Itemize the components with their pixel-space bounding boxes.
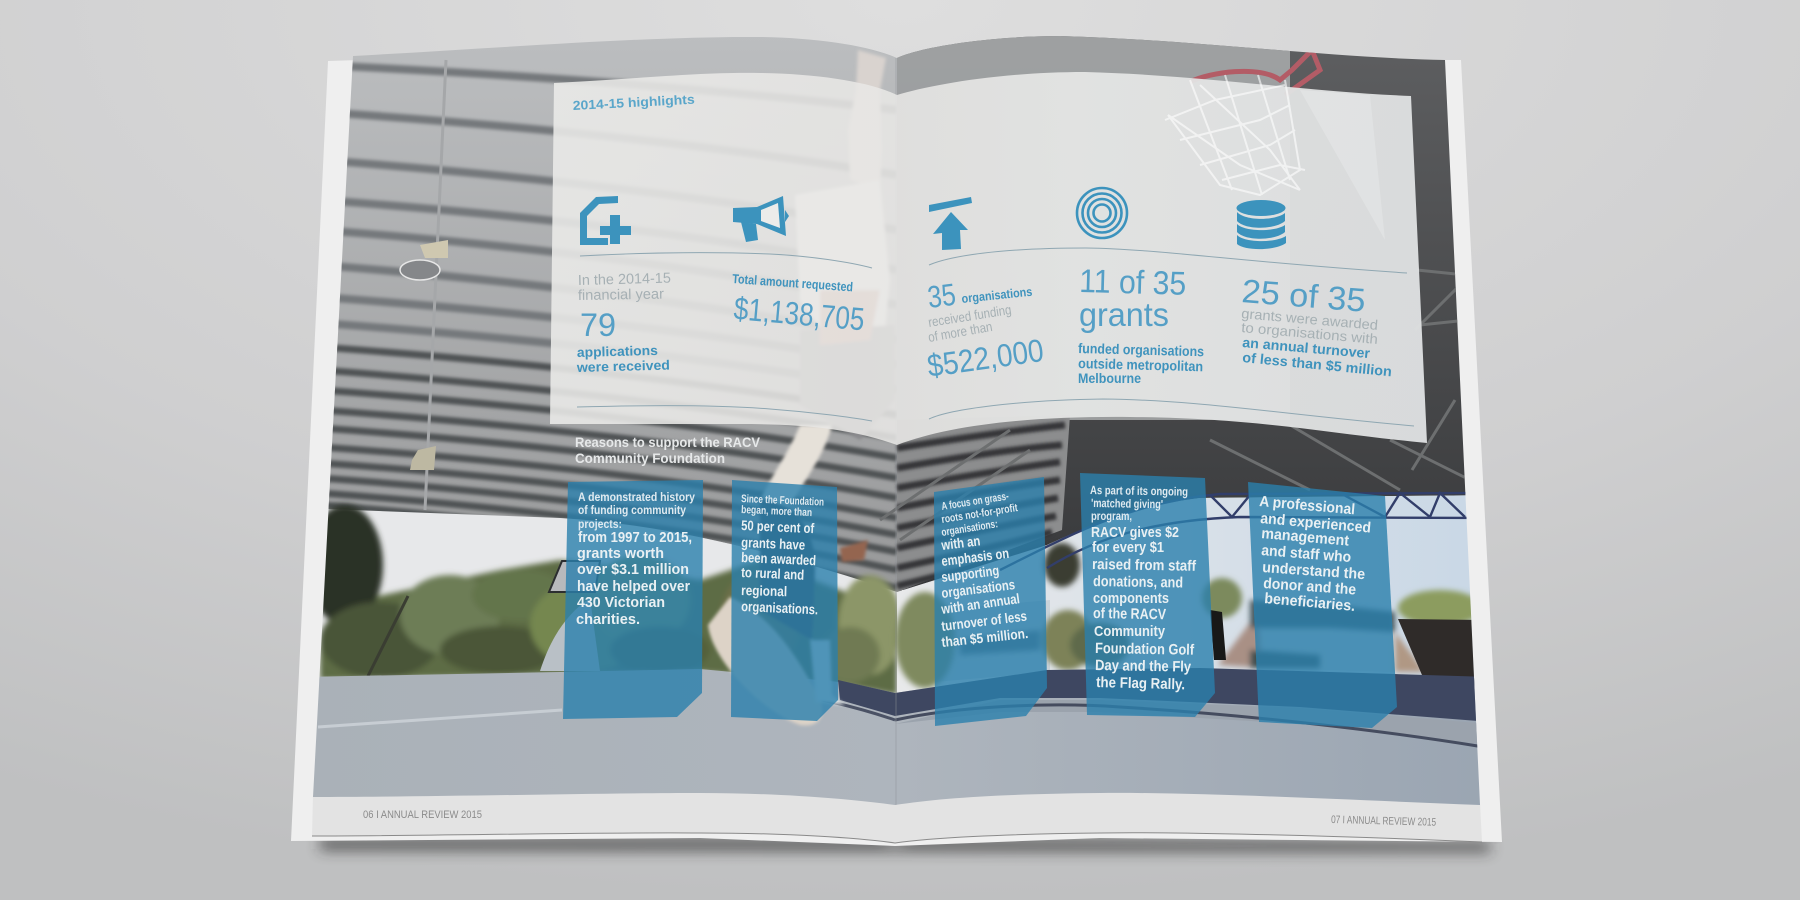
backboard [549,561,600,592]
brochure cover edge [291,60,1502,846]
reason box 4: matched giving: RACV gives $2 [1091,524,1179,541]
reason box 5: professional management [1248,482,1397,728]
stat: 25 of 35 grants: grants were awarded [1241,305,1379,333]
reason box 3: grass-roots focus: A focus on grass- [941,490,1010,513]
stat: 35 organisations: of more than [927,319,994,345]
reason box 2: rural and regional grants: began, more than [741,504,813,519]
reason box 4: matched giving: Foundation Golf [1095,640,1195,659]
reason box 3: grass-roots focus: organisations: [941,518,999,539]
reason box 2: rural and regional grants: Since the Foundation [741,493,825,509]
stat: 35 organisations [925,277,1046,384]
right roof [880,30,1500,592]
roof trusses [880,270,1470,540]
shelter [540,598,600,671]
reason box 4: matched giving: Day and the Fly [1095,657,1192,676]
reason box 2: rural and regional grants: grants have [741,534,806,553]
reason box 4: matched giving: 'matched giving' [1091,496,1163,511]
reason box 1: funding history: have helped over [577,578,690,595]
stat: 35 organisations: 35 [926,277,958,315]
stat: 79 applications: were received [576,358,670,375]
reason box 4: matched giving: of the RACV [1093,605,1166,623]
reason box 4: matched giving: donations, and [1093,573,1183,592]
reason box 3: grass-roots focus: emphasis on [940,545,1010,569]
reason box 4: matched giving: the Flag Rally. [1096,674,1185,693]
reason box 5: professional management: and experienced [1260,510,1372,537]
reason box 3: grass-roots focus: supporting [940,562,1000,585]
reason box 2: rural and regional grants [731,480,838,721]
stat: 25 of 35 grants [1240,272,1393,379]
reason box 5: professional management: A professional [1259,493,1356,518]
stat: 11 of 35 grants: Melbourne [1078,370,1141,386]
stat: 11 of 35 grants [1078,262,1204,386]
stat: 79 applications: applications [577,343,658,360]
panel glare [1300,90,1385,240]
reason box 3: grass-roots focus: turnover of less [940,608,1028,634]
reason box 3: grass-roots focus: organisations [940,576,1016,601]
player silhouette [708,50,895,725]
icon: document with plus [580,196,631,245]
reason box 4: matched giving: program, [1091,509,1132,523]
roof edge truss [1000,493,1480,570]
reason box 3: grass-roots focus: than $5 million. [941,625,1029,650]
panel background [550,72,1427,445]
heading: reasons to support: Community Foundation [575,450,725,466]
stat: 25 of 35 grants: of less than $5 million [1242,349,1393,379]
stat: 79 applications: financial year [578,286,664,304]
reason box 4: matched giving: As part of its ongoing [1090,483,1188,499]
reason box 4: matched giving: components [1093,590,1169,607]
reason box 1: funding history: of funding community [578,503,686,517]
reason box 2: rural and regional grants: regional [741,582,787,599]
reason box 1: funding history: 430 Victorian [577,594,665,611]
reason box 4: matched giving [1080,473,1215,717]
stat: 79 applications: In the 2014-15 [578,271,671,289]
stat: 11 of 35 grants: outside metropolitan [1078,355,1203,374]
stat: 35 organisations: organisations [961,285,1033,306]
reason box 4: matched giving: for every $1 [1092,539,1164,556]
reason box 2: rural and regional grants: 50 per cent of [741,517,815,536]
icon: megaphone [733,196,789,242]
reason box 5: professional management: and staff who [1261,542,1352,566]
spine fold [896,58,897,805]
post [902,590,903,591]
reason box 2: rural and regional grants: to rural and [741,564,805,583]
stat: 35 organisations: received funding [927,302,1012,330]
reason box 3: grass-roots focus [934,477,1047,726]
icon: concentric target [1077,188,1127,238]
reason box 1: funding history [563,480,703,719]
footer: left page number: 06 I ANNUAL REVIEW 2015 [363,809,482,821]
icon: arrow under bar [929,197,972,250]
page edge line [312,833,1482,843]
stat: 79 applications: 79 [580,307,616,343]
hoop pole [368,596,408,676]
stat: 11 of 35 grants: funded organisations [1078,340,1204,359]
reason box 3: grass-roots focus: roots not-for-profit [941,502,1019,526]
reason box 2: rural and regional grants: organisations. [741,598,818,617]
stat: 25 of 35 grants: to organisations with [1241,319,1379,347]
reason box 3: grass-roots focus: with an [940,532,981,553]
heading: reasons to support [575,434,761,466]
stat: total amount requested: $1,138,705 [732,290,866,337]
reason box 5: professional management: donor and the [1263,575,1357,598]
reason box 3: grass-roots focus: with an annual [939,590,1021,617]
divider lines [577,248,1414,426]
court floor [313,668,1480,805]
icon: coin stack [1236,200,1286,249]
book drop shadow [320,838,1490,852]
footer: right page number: 07 I ANNUAL REVIEW 2015 [1331,814,1436,829]
stat: 11 of 35 grants: grants [1079,296,1169,333]
reason box 1: funding history: over $3.1 million [577,561,689,578]
stat: 25 of 35 grants: an annual turnover [1242,334,1371,361]
stat: 79 applications [576,271,671,375]
red basketball hoop [1192,52,1323,88]
reason box 4: matched giving: raised from staff [1092,556,1197,575]
left roof [300,30,897,592]
reason box 4: matched giving: Community [1094,623,1166,640]
heading: 2014-15 highlights [572,92,695,113]
reason box 1: funding history: grants worth [577,545,664,562]
left sky and trees [300,505,905,700]
lower lamp [410,446,436,470]
hanging lamp [400,240,448,280]
basketball net [1165,75,1305,195]
stat: 11 of 35 grants: 11 of 35 [1079,262,1187,302]
reason box 1: funding history: charities. [576,611,640,628]
building [1398,619,1478,686]
reason box 5: professional management: understand the [1262,559,1366,583]
stat: total amount requested: Total amount requested [732,271,854,294]
stat: 35 organisations: $522,000 [925,332,1046,384]
stat: total amount requested [732,271,866,337]
reason box 1: funding history: projects: [578,517,622,531]
far wall [1046,600,1395,670]
reason box 2: rural and regional grants: been awarded [741,549,816,568]
heading: reasons to support: Reasons to support the RACV [575,434,761,450]
reason box 1: funding history: A demonstrated history [578,490,695,504]
photograph spread [300,30,1500,820]
person silhouette [1210,610,1226,660]
reason box 5: professional management: management [1261,525,1350,550]
reason box 5: professional management: beneficiaries. [1264,590,1356,615]
stat: 25 of 35 grants: 25 of 35 [1240,272,1367,319]
page bottom margin [312,791,1482,843]
reason box 1: funding history: from 1997 to 2015, [578,529,692,546]
panel: 2014-15 highlights [550,72,1427,445]
right sky and scenery [895,493,1500,700]
